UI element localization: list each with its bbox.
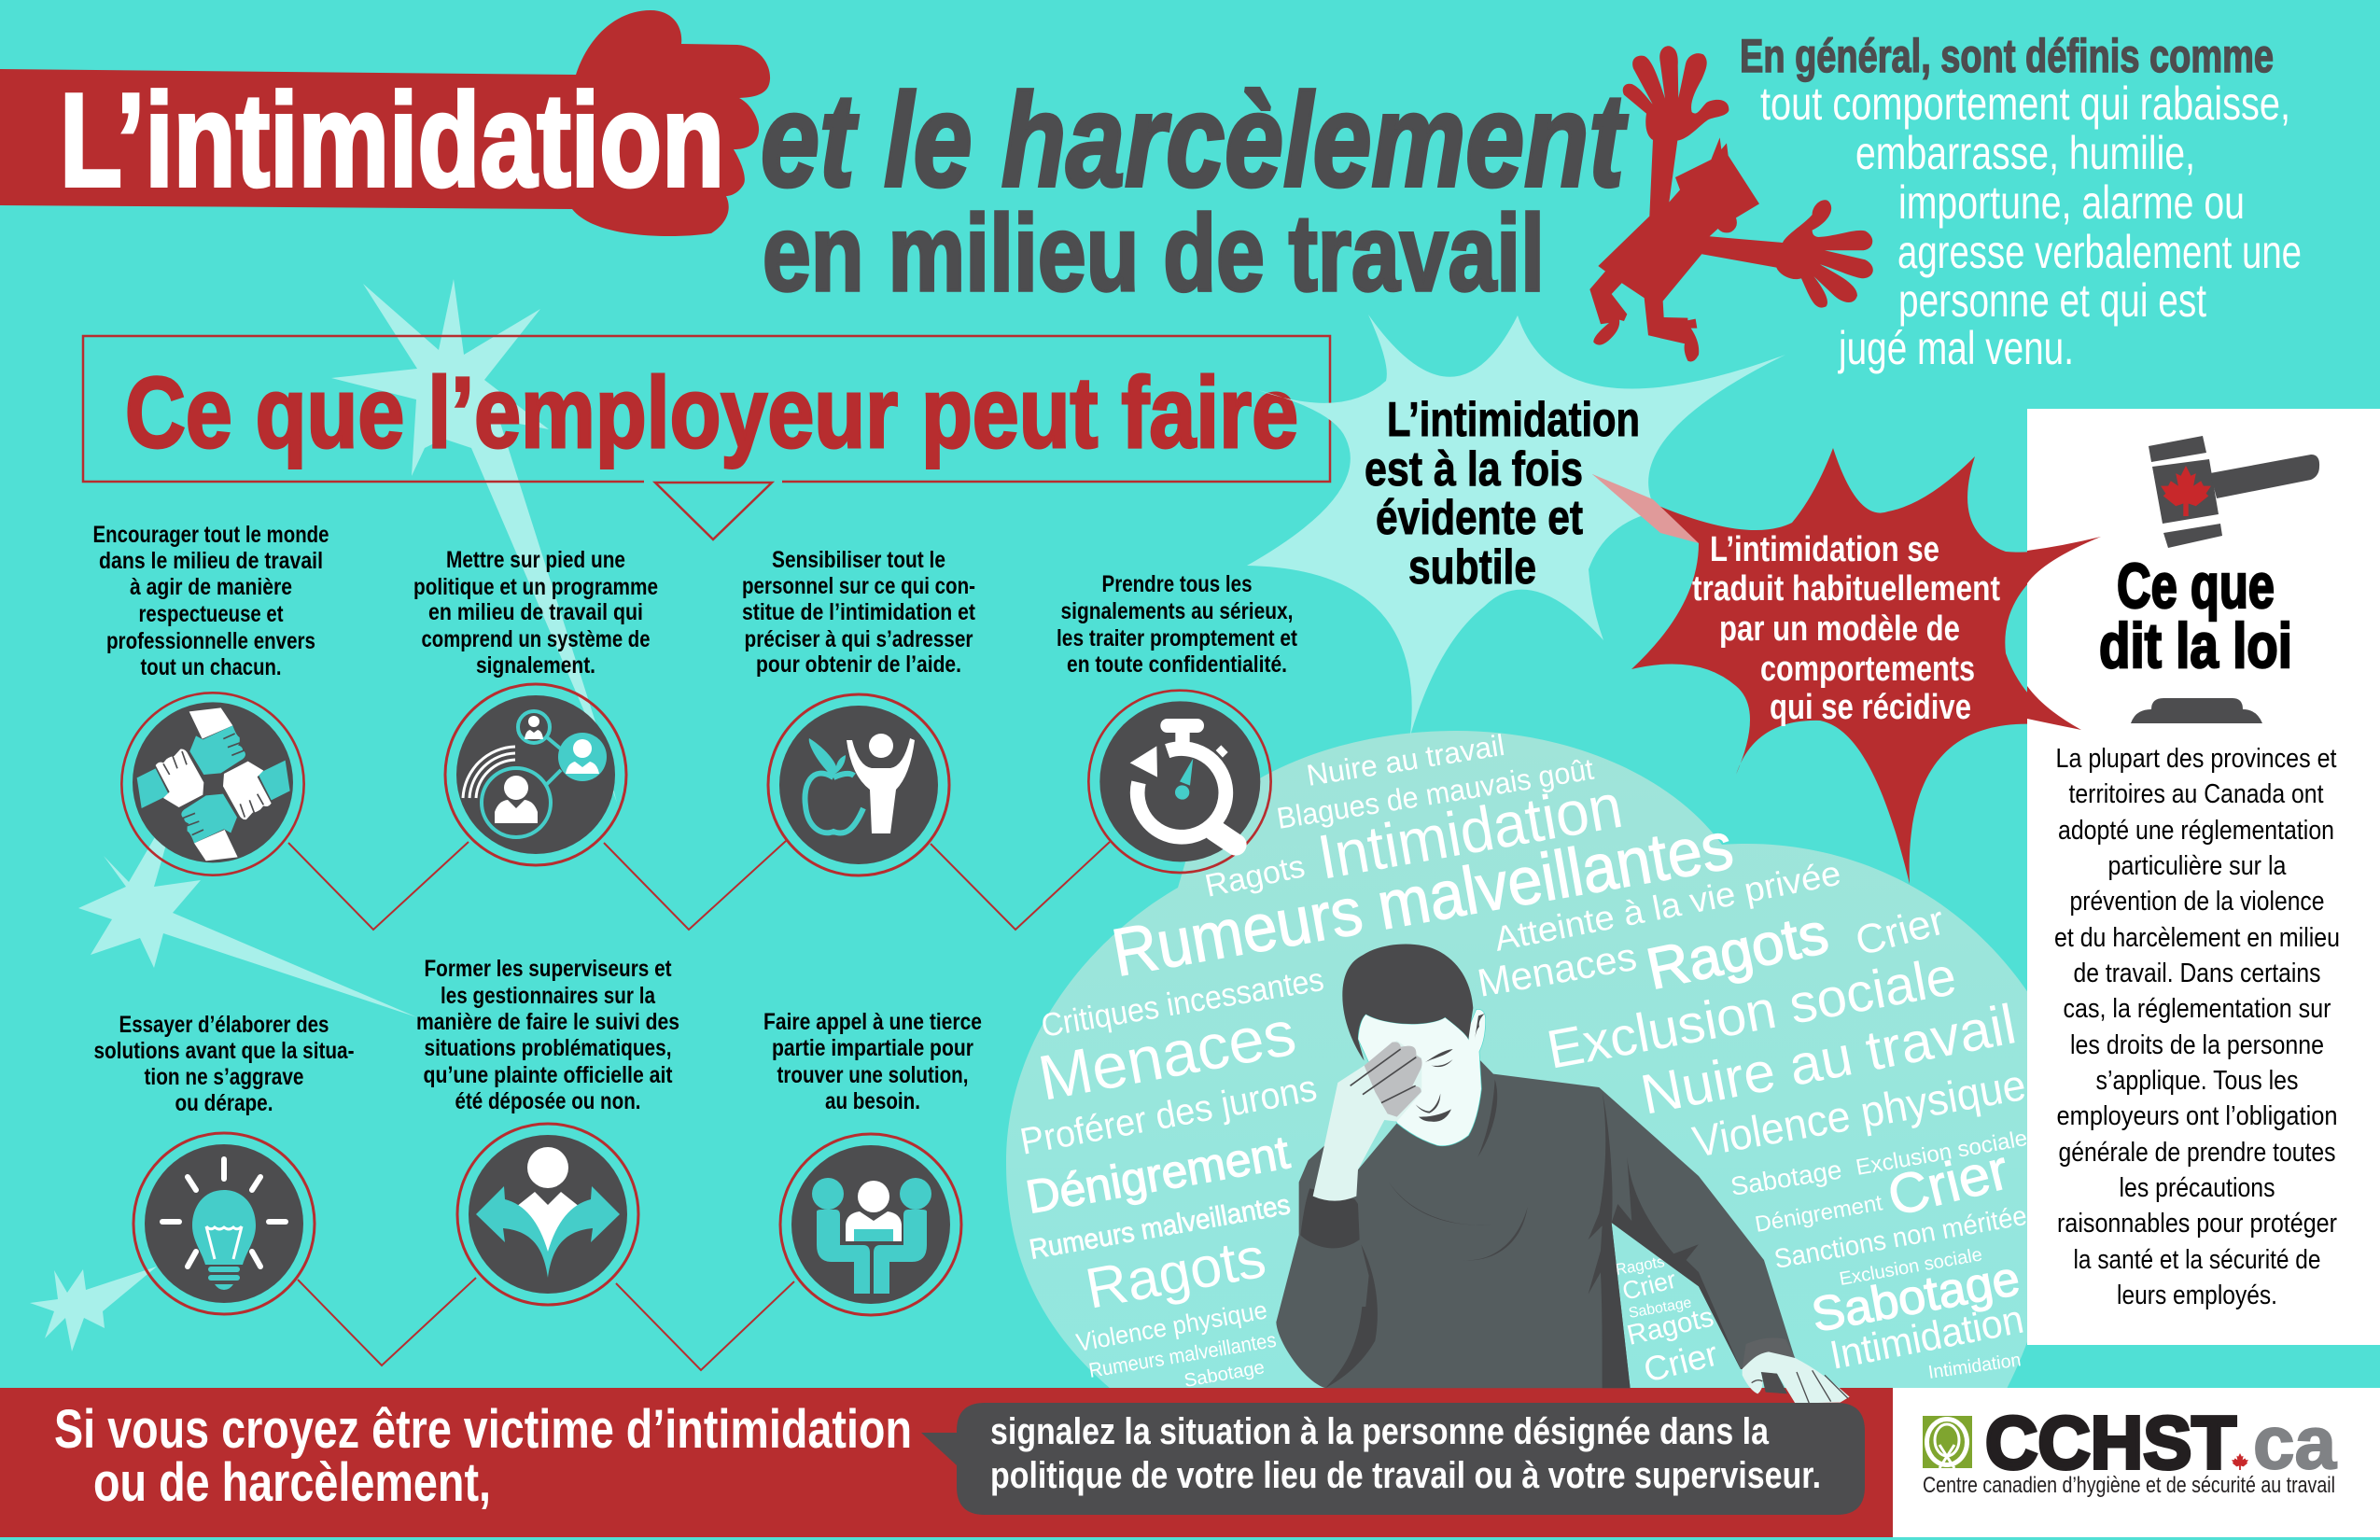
burst text: obvious and subtle: évidente et [1376, 491, 1583, 545]
word cloud: Menaces [1033, 997, 1301, 1114]
word cloud: Exclusion sociale [1543, 945, 1961, 1081]
action 2 text: comprend un système de [422, 626, 651, 652]
word cloud: Crier [1640, 1335, 1722, 1390]
burst text: pattern of behaviours: comportements [1760, 650, 1975, 689]
action 5 text: tion ne s’aggrave [144, 1064, 304, 1090]
bottom message: lead text: Si vous croyez être victime d’intimidation [54, 1399, 912, 1460]
zigzag connector lines [288, 841, 1110, 1370]
action 3 text: pour obtenir de l’aide. [756, 651, 961, 678]
burst text: pattern of behaviours: par un modèle de [1719, 609, 1960, 649]
logo wordmark: CCHST [1985, 1401, 2236, 1484]
panel body text: et du harcèlement en milieu [2054, 923, 2340, 953]
action 1 text: à agir de manière [130, 574, 292, 600]
word cloud: Intimidation [1313, 771, 1628, 893]
word cloud: Sabotage [1729, 1155, 1843, 1201]
icon: joined hands [121, 693, 304, 875]
shirt shading [1300, 1080, 1748, 1388]
panel: what the law says [2027, 409, 2380, 1345]
action 6 text: les gestionnaires sur la [441, 983, 656, 1009]
word cloud: Violence physique [1689, 1059, 2029, 1167]
action 7 text: au besoin. [825, 1088, 920, 1114]
action 7 text [763, 1009, 982, 1114]
red burst tip over panel [2027, 537, 2101, 730]
logo white panel [1893, 1388, 2380, 1537]
burst text: pattern of behaviours: L’intimidation se [1710, 530, 1939, 569]
speech bubble [921, 1403, 1865, 1515]
logo [1923, 1401, 2337, 1498]
word cloud blob [1006, 731, 2060, 1389]
action 4 text: signalements au sérieux, [1060, 598, 1294, 624]
panel heading: dit la loi [2099, 610, 2292, 681]
action 6 text: situations problématiques, [424, 1035, 672, 1061]
red burst [1592, 448, 2101, 884]
word cloud: Sabotage [1808, 1252, 2023, 1343]
action 4 text: Prendre tous les [1101, 571, 1253, 597]
icon: meeting at table [780, 1134, 961, 1315]
panel body text: prévention de la violence [2070, 887, 2324, 917]
action text: top row [93, 522, 1298, 680]
word cloud: Intimidation [1927, 1350, 2023, 1383]
action 3 text [742, 547, 976, 678]
face [1358, 1009, 1486, 1146]
word cloud: Sanctions non méritée [1772, 1201, 2029, 1275]
action 1 text: dans le milieu de travail [99, 548, 323, 574]
action 4 text: les traiter promptement et [1057, 625, 1298, 651]
action 2 text: signalement. [476, 652, 595, 679]
logo leaf [2232, 1453, 2248, 1470]
panel body text: les droits de la personne [2070, 1030, 2324, 1060]
burst text: pattern of behaviours: qui se récidive [1770, 688, 1971, 727]
action 7 text: Faire appel à une tierce [763, 1009, 982, 1035]
panel body text: employeurs ont l’obligation [2057, 1101, 2337, 1131]
panel body text: cas, la réglementation sur [2063, 994, 2331, 1024]
panel body text: générale de prendre toutes [2059, 1138, 2335, 1168]
panel body text: territoires au Canada ont [2068, 779, 2324, 809]
word cloud: Sabotage [1628, 1295, 1693, 1322]
word cloud: Ragots [1624, 1302, 1716, 1351]
action 5 text [93, 1012, 355, 1116]
icon: gavel [2149, 436, 2319, 548]
icon: falling red figure [1589, 46, 1873, 361]
star burst: top centre [331, 279, 617, 803]
word cloud: Ragots [1081, 1225, 1270, 1321]
word cloud: Proférer des jurons [1017, 1068, 1320, 1163]
word cloud: Exclusion sociale [1838, 1244, 1984, 1290]
icon: stopwatch magnifier [1088, 691, 1271, 873]
word cloud: Blagues de mauvais goût [1274, 752, 1596, 835]
burst text: obvious and subtle [1365, 393, 1640, 595]
raised hand [1313, 1041, 1421, 1201]
icon: person with diverging arrows [457, 1124, 638, 1305]
definition body [1760, 77, 2302, 374]
panel heading [2099, 551, 2292, 681]
word cloud: Critiques incessantes [1039, 961, 1326, 1044]
title: en milieu de travail: en milieu de travail [763, 192, 1545, 314]
star burst: bottom left [30, 1267, 157, 1351]
shirt [1276, 1057, 1795, 1388]
action 1 text [93, 522, 329, 680]
bubble text: politique de votre lieu de travail ou à votre superviseur. [990, 1455, 1821, 1496]
burst text: obvious and subtle: L’intimidation [1387, 393, 1640, 447]
resting hand [1743, 1337, 1850, 1403]
word cloud: Rumeurs malveillantes [1027, 1189, 1293, 1266]
panel body text: s’applique. Tous les [2096, 1066, 2298, 1096]
icon: reporting network [445, 684, 626, 865]
word cloud: Violence physique [1074, 1295, 1269, 1357]
burst text: pattern of behaviours: traduit habituellement [1692, 569, 2000, 609]
action 2 text [413, 547, 658, 679]
action 1 text: professionnelle envers [106, 628, 315, 654]
title: L'intimidation: L’intimidation [60, 66, 724, 215]
action 5 text: ou dérape. [175, 1090, 273, 1116]
action 5 text: solutions avant que la situa- [93, 1038, 355, 1064]
panel body text: particulière sur la [2107, 851, 2287, 881]
bottom message: lead text: ou de harcèlement, [93, 1452, 491, 1513]
action 7 text: partie impartiale pour [772, 1035, 973, 1061]
icon: bulb [133, 1133, 315, 1314]
action 6 text: Former les superviseurs et [424, 956, 672, 982]
panel body text: La plupart des provinces et [2055, 744, 2337, 774]
word cloud: Atteinte à la vie privée [1491, 854, 1844, 959]
action 3 text: stitue de l’intimidation et [742, 599, 976, 625]
word cloud: Ragots [1642, 901, 1834, 1002]
action text: bottom row [93, 956, 982, 1116]
hair [1342, 945, 1473, 1061]
light burst [1247, 315, 1785, 735]
word cloud: Sabotage [1183, 1357, 1267, 1392]
word cloud: Dénigrement [1022, 1126, 1294, 1224]
action 2 text: en milieu de travail qui [428, 599, 643, 625]
gavel base [2131, 698, 2262, 723]
person illustration [1276, 945, 1795, 1388]
burst overlap tip [1592, 474, 1699, 543]
word cloud: Crier [1851, 897, 1949, 965]
definition text [1740, 30, 2302, 374]
word cloud: Intimidation [1827, 1297, 2027, 1379]
red bottom band [0, 1388, 1893, 1537]
finger lines [1351, 1049, 1416, 1103]
panel body text: leurs employés. [2117, 1281, 2277, 1310]
heading pointer triangle [655, 483, 772, 539]
definition body: personne et qui est [1898, 274, 2206, 327]
action 6 text: manière de faire le suivi des [416, 1009, 679, 1035]
burst text: obvious and subtle: subtile [1408, 540, 1536, 595]
action 4 text [1057, 571, 1298, 678]
logo emblem [1923, 1416, 1972, 1468]
definition body: importune, alarme ou [1898, 176, 2245, 229]
ear and facial features [1416, 1014, 1485, 1122]
action 3 text: préciser à qui s’adresser [745, 626, 973, 652]
word cloud: Dénigrement [1753, 1190, 1884, 1238]
panel body text [2054, 744, 2340, 1310]
grey fingers [1365, 1042, 1422, 1117]
action 1 text: Encourager tout le monde [93, 522, 329, 548]
word cloud: Ragots [1614, 1253, 1666, 1279]
word cloud: Nuire au travail [1304, 728, 1506, 792]
word cloud: Exclusion sociale [1854, 1126, 2029, 1181]
action 4 text: en toute confidentialité. [1067, 651, 1287, 678]
action 6 text: qu’une plainte officielle ait [424, 1062, 673, 1088]
word cloud: Crier [1619, 1266, 1679, 1306]
action 6 text: été déposée ou non. [455, 1088, 640, 1114]
panel heading: Ce que [2117, 551, 2275, 622]
action 5 text: Essayer d’élaborer des [119, 1012, 329, 1038]
action 1 text: respectueuse et [138, 601, 284, 627]
panel body text: adopté une réglementation [2058, 816, 2334, 846]
action 3 text: Sensibiliser tout le [772, 547, 945, 573]
word cloud: Menaces [1474, 934, 1640, 1005]
definition body: embarrasse, humilie, [1855, 127, 2195, 179]
icon: apple and figure [768, 694, 949, 875]
panel body text: la santé et la sécurité de [2074, 1245, 2320, 1275]
star burst: left [78, 831, 417, 1017]
panel body text: raisonnables pour protéger [2057, 1209, 2337, 1239]
section heading box [83, 336, 1330, 539]
logo domain: ca [2253, 1401, 2337, 1484]
word cloud: Rumeurs malveillantes [1087, 1328, 1278, 1382]
panel body text: de travail. Dans certains [2074, 959, 2320, 988]
action 2 text: politique et un programme [413, 574, 658, 600]
bubble text: signalez la situation à la personne désignée dans la [990, 1411, 1770, 1452]
heading text: Ce que l’employeur peut faire [125, 356, 1298, 469]
title red fist arm [0, 10, 770, 236]
burst text: obvious and subtle: est à la fois [1365, 442, 1583, 497]
word cloud: Crier [1882, 1138, 2014, 1228]
word cloud: Nuire au travail [1636, 992, 2021, 1127]
burst text: pattern of behaviours [1692, 530, 2000, 727]
action 3 text: personnel sur ce qui con- [742, 573, 975, 599]
bottom message: lead text [54, 1399, 912, 1513]
title: et le harcèlement: et le harcèlement [761, 66, 1629, 215]
word cloud: Ragots [1202, 848, 1308, 904]
action 2 text: Mettre sur pied une [446, 547, 625, 573]
panel body text: les précautions [2119, 1173, 2275, 1203]
bubble text [990, 1411, 1821, 1496]
word cloud: Rumeurs malveillantes [1107, 808, 1739, 991]
action 1 text: tout un chacun. [140, 654, 282, 680]
action 7 text: trouver une solution, [777, 1062, 969, 1088]
definition body: jugé mal venu. [1837, 322, 2074, 374]
word cloud [1017, 728, 2029, 1392]
action 6 text [416, 956, 679, 1114]
